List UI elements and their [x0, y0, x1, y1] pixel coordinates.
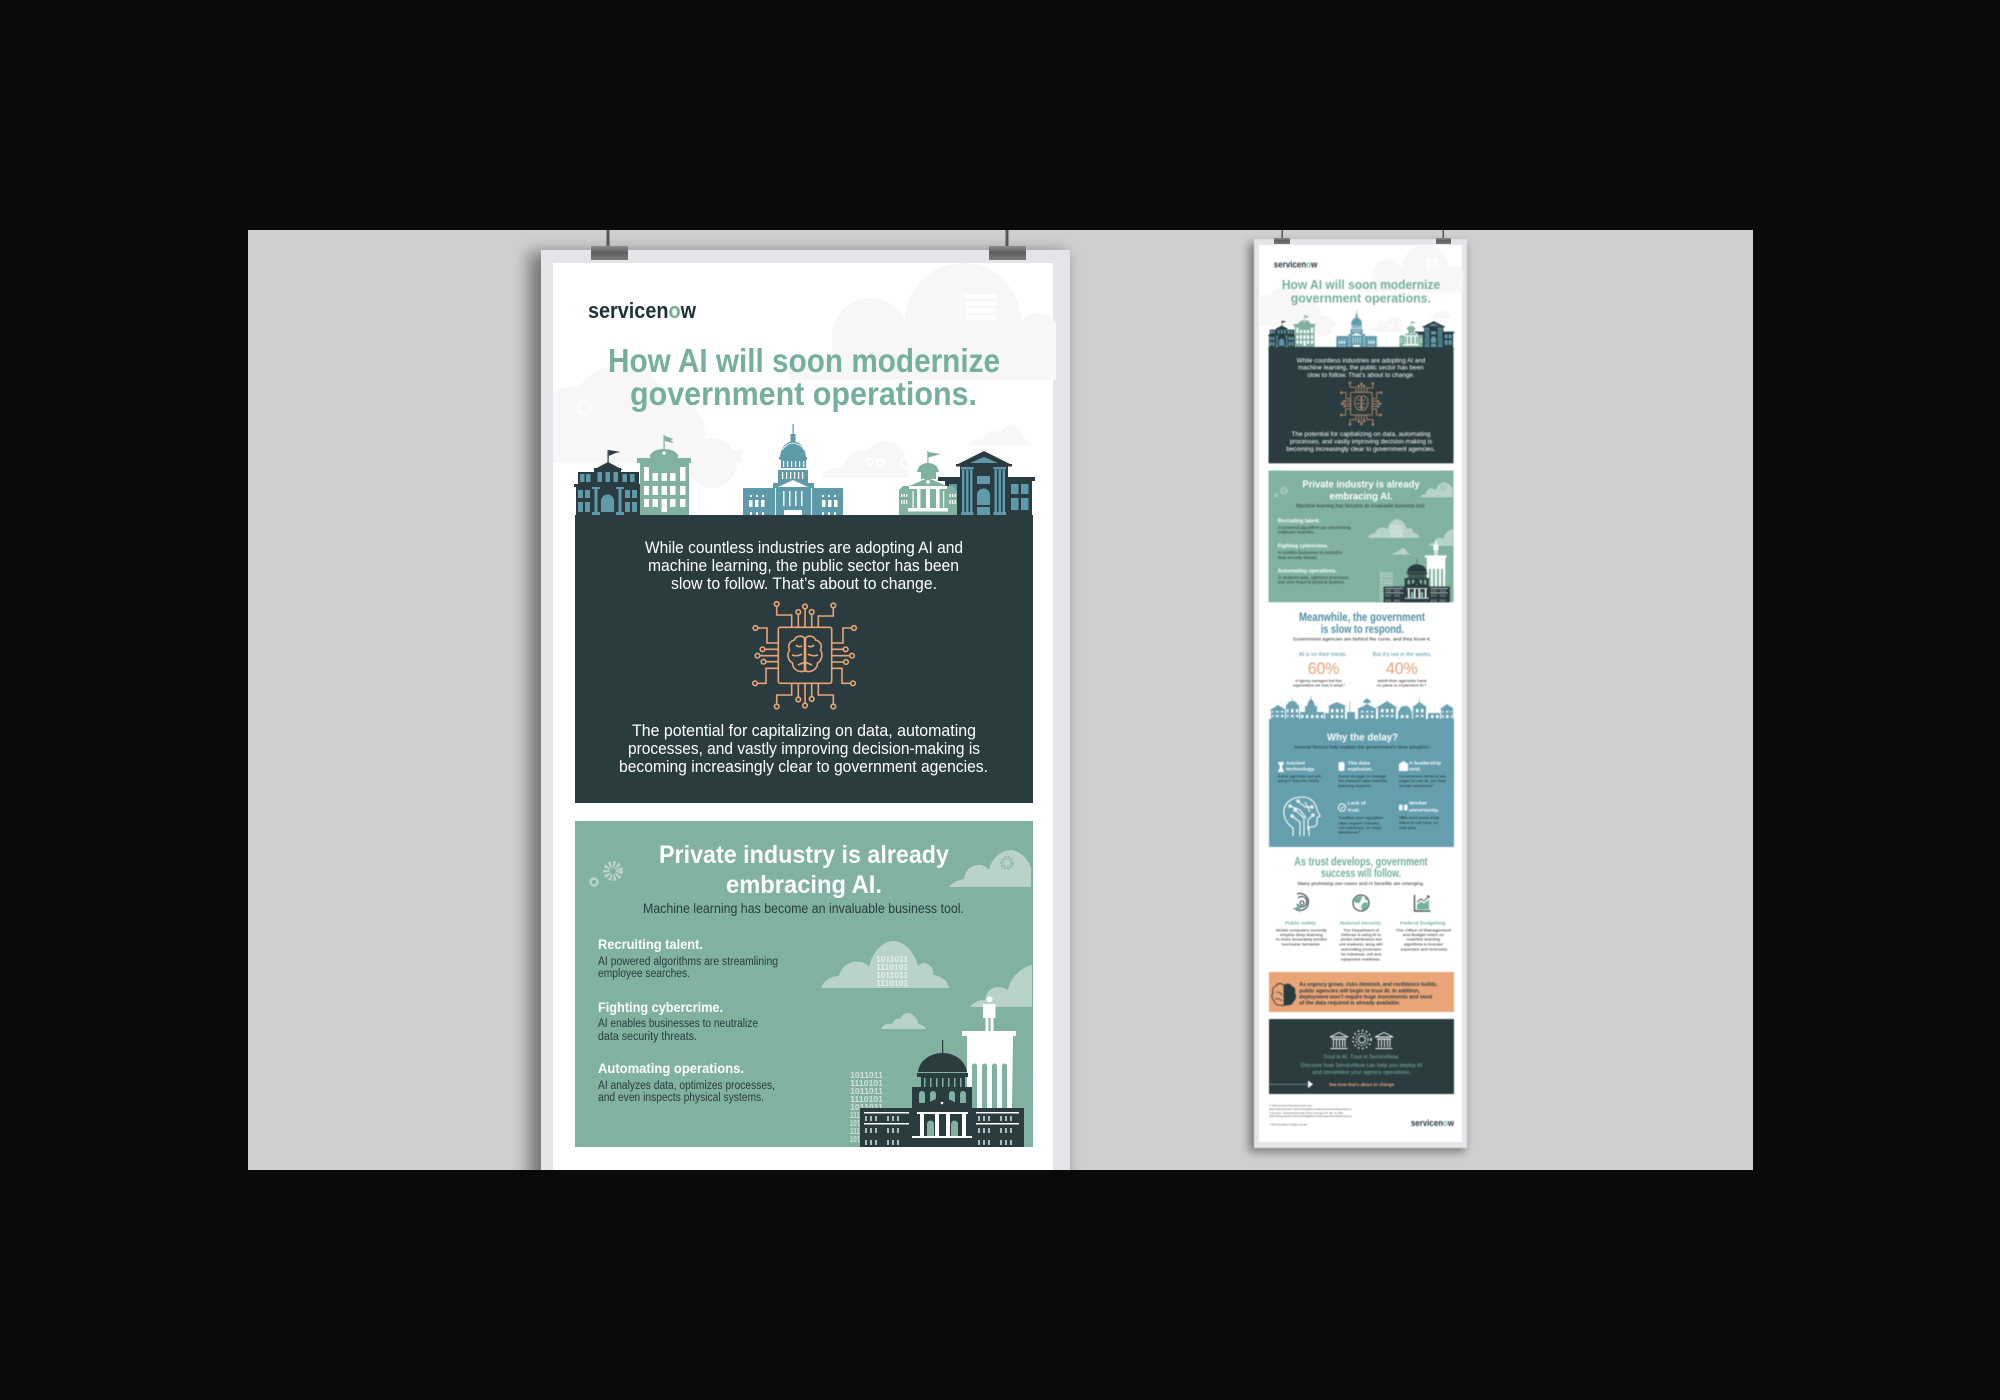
call to action text — [1301, 1055, 1422, 1076]
column: national security: equipment readiness. — [1341, 957, 1381, 962]
stat: 60 percent: AI is on their minds. — [1299, 652, 1347, 658]
panel: private industry: 111 — [850, 1126, 860, 1136]
panel: private industry: 1011011 — [850, 1070, 883, 1080]
icon: rising chart — [1414, 895, 1430, 911]
column: federal budgeting: Federal budgeting. — [1400, 920, 1447, 926]
scaled top of poster: embracing AI. — [1330, 492, 1393, 503]
item: lack of trust: Tradition and regulation — [1338, 815, 1383, 820]
scaled top of poster: slow to follow. That’s about to change. — [1307, 372, 1415, 379]
skyline strip: blue buildings — [1270, 696, 1454, 719]
column: public safety — [1276, 920, 1328, 946]
item: worker uncertainty: 78% don’t know what — [1399, 815, 1440, 820]
scaled top of poster: Fighting cybercrime. — [1278, 544, 1329, 550]
item: data explosion: the massive data machine — [1338, 778, 1387, 783]
item: lack of trust: decisions.³ — [1338, 830, 1361, 835]
callout text: of the data required is already available. — [1299, 1001, 1401, 1007]
column: national security: predict maintenance and — [1341, 937, 1382, 942]
column: public safety: hurricane behavior. — [1282, 941, 1321, 946]
item: worker uncertainty: their jobs. — [1399, 825, 1417, 830]
column: national security: National security. — [1340, 920, 1382, 926]
section: trust develops — [1276, 856, 1452, 962]
item: lack of trust: trust. — [1348, 807, 1360, 813]
stat: 40 percent: admit their agencies have — [1377, 678, 1427, 683]
stat: 40 percent: 40% — [1386, 660, 1418, 678]
item: cybercrime: Fighting cybercrime. — [598, 999, 723, 1015]
item: ancient technology — [1278, 761, 1321, 783]
logo: servicenow — [588, 298, 697, 323]
footnotes: https://www.accenture.com/us-en/insights/us-federal-government/study-future-ai — [1269, 1115, 1352, 1118]
intro text continued: becoming increasingly clear to government agencies. — [619, 758, 988, 776]
building: dark hall — [574, 450, 642, 515]
column: national security — [1339, 920, 1383, 962]
poster: full infographic — [1252, 239, 1467, 1148]
column: national security: The Department of — [1343, 927, 1380, 932]
scaled top of poster: AI enables businesses to neutralize — [1278, 550, 1343, 555]
item: lack of trust: not machines, to make — [1338, 825, 1381, 830]
column: national security: Defense is using AI to — [1341, 932, 1381, 937]
scaled top of poster: servicenow — [1274, 259, 1317, 269]
icon: circuit head — [1284, 797, 1320, 836]
footnotes: 1. 2018 Government Business Council survey. — [1269, 1104, 1313, 1108]
item: cybercrime: data security threats. — [598, 1031, 697, 1043]
item: data explosion: Some struggle to manage — [1338, 773, 1386, 778]
intro text continued — [619, 722, 988, 776]
item: ancient technology: Ancient — [1286, 761, 1305, 767]
item: automating — [598, 1060, 775, 1104]
intro text: slow to follow. That’s about to change. — [671, 575, 937, 593]
column: national security: automating processes — [1341, 947, 1381, 952]
icon: brain chip — [753, 602, 856, 709]
panel: private industry: 1011011 — [850, 1102, 883, 1112]
private industry text — [598, 841, 964, 1104]
panel: private industry — [575, 821, 1033, 1147]
scaled top of poster: data security threats. — [1278, 555, 1318, 560]
footnotes: https://www.accenture.com/us-en/insights/us-federal-government/study-future-ai — [1269, 1108, 1352, 1111]
scaled top of poster: AI powered algorithms are streamlining — [1278, 525, 1351, 530]
call to action text: Discover how ServiceNow can help you deploy AI — [1301, 1063, 1422, 1069]
intro text: machine learning, the public sector has been — [648, 557, 959, 575]
item: recruiting: Recruiting talent. — [598, 936, 703, 952]
item: data explosion: The data — [1348, 761, 1370, 767]
scaled top of poster: Private industry is already — [1302, 480, 1420, 491]
stat: 60 percent: organizations are slow to adopt.¹ — [1293, 683, 1346, 688]
item: cybercrime — [598, 999, 758, 1043]
column: federal budgeting: The Office of Management — [1396, 927, 1452, 932]
call to action text: Trust in AI. Trust in ServiceNow. — [1323, 1055, 1399, 1061]
binary digits: 1011011 — [876, 955, 909, 964]
scaled top of poster: Machine learning has become an invaluable business tool. — [1296, 504, 1426, 510]
poster: large close-up — [534, 250, 1070, 1180]
item: worker uncertainty — [1399, 801, 1440, 830]
column: national security: for individual, unit and — [1341, 952, 1381, 957]
item: leadership void: remain untrained.³ — [1399, 783, 1435, 788]
item: worker uncertainty: effect AI will have on — [1399, 820, 1438, 825]
panel: private industry: 111 — [850, 1110, 860, 1120]
background clouds — [534, 263, 1060, 488]
binary digits — [876, 955, 909, 988]
binary digits: 1110101 — [876, 963, 909, 972]
footnotes: © 2019 ServiceNow. All rights reserved. — [1269, 1124, 1308, 1126]
clouds — [821, 850, 1032, 1029]
item: lack of trust: Lack of — [1348, 801, 1366, 807]
item: data explosion: explosion. — [1348, 767, 1373, 773]
item: data explosion: learning requires. — [1338, 783, 1371, 788]
item: lack of trust: often require humans, — [1338, 820, 1380, 825]
scaled top of poster: and even inspects physical systems. — [1278, 580, 1345, 585]
stat: 60 percent: of agency managers feel that — [1295, 678, 1343, 683]
item: recruiting: employee searches. — [598, 968, 690, 980]
link: See how that’s about to change — [1329, 1082, 1394, 1088]
binder clips on large poster — [591, 230, 1026, 260]
skyline of government buildings — [574, 424, 1035, 515]
stat: 40 percent: But it’s not in the works. — [1373, 652, 1432, 658]
item: leadership void: A leadership — [1409, 761, 1441, 767]
intro text — [645, 539, 963, 593]
scaled top of poster: While countless industries are adopting AI and — [1297, 357, 1426, 364]
building: blue capitol — [743, 424, 843, 515]
scaled top of poster — [1252, 245, 1464, 602]
panel: private industry: 1011011 — [850, 1086, 883, 1096]
item: leadership void: eager to use AI, yet they — [1399, 778, 1446, 783]
heading — [659, 841, 949, 899]
column: federal budgeting: algorithms to forecast — [1404, 942, 1444, 947]
item: automating: AI analyzes data, optimizes processes, — [598, 1080, 775, 1092]
heading: is slow to respond. — [1321, 624, 1404, 636]
item: recruiting — [598, 936, 778, 980]
callout text — [1299, 982, 1438, 1007]
subheading: Machine learning has become an invaluable business tool. — [643, 901, 964, 916]
item: cybercrime: AI enables businesses to neutralize — [598, 1018, 758, 1030]
heading: As trust develops, government — [1294, 856, 1428, 868]
heading — [1294, 856, 1428, 880]
item: recruiting: AI powered algorithms are streamlining — [598, 956, 778, 968]
panel: intro — [575, 515, 1033, 803]
item: leadership void: Government workers are — [1399, 773, 1446, 778]
column: public safety: to more accurately predict — [1276, 937, 1328, 942]
panel: call to action — [1269, 1019, 1454, 1094]
stat: 40 percent: no plans to implement AI.² — [1377, 683, 1427, 688]
scaled top of poster: Recruiting talent. — [1278, 518, 1321, 524]
icon: gears — [590, 864, 620, 886]
heading: Private industry is already — [659, 841, 949, 869]
panel: why the delay — [1269, 719, 1454, 847]
column: federal budgeting: expenses and revenues. — [1401, 947, 1448, 952]
column: national security: unit readiness, along with — [1339, 942, 1383, 947]
title: government operations. — [630, 375, 977, 412]
heading: success will follow. — [1321, 868, 1401, 880]
item: worker uncertainty: uncertainty. — [1409, 807, 1439, 813]
scaled top of poster: The potential for capitalizing on data, automating — [1292, 431, 1431, 438]
scaled top of poster: Automating operations. — [1278, 568, 1337, 574]
stat: 40 percent — [1373, 652, 1432, 688]
panel: private industry: 101 — [850, 1134, 860, 1144]
binder clips on full poster — [1274, 230, 1451, 244]
display wall backdrop — [248, 230, 1753, 1192]
scaled top of poster: How AI will soon modernize — [1282, 277, 1440, 292]
callout text: deployment won’t require huge investments and most — [1299, 994, 1432, 1000]
item: ancient technology: Some agencies are still — [1278, 773, 1321, 778]
heading: Meanwhile, the government — [1299, 612, 1425, 624]
icon: institutions and gear — [1330, 1030, 1393, 1048]
item: data explosion — [1338, 761, 1387, 788]
item: lack of trust — [1338, 801, 1383, 835]
icon: radar — [1293, 893, 1308, 913]
item: worker uncertainty: Worker — [1409, 801, 1427, 807]
scaled top of poster: government operations. — [1291, 291, 1431, 306]
item: automating: and even inspects physical systems. — [598, 1092, 764, 1104]
heading — [1299, 612, 1425, 636]
binary digits: 1110101 — [876, 979, 909, 988]
stat: 60 percent — [1293, 652, 1347, 688]
building: green offices — [637, 435, 691, 515]
title: How AI will soon modernize — [608, 342, 1000, 379]
item: ancient technology: using IT from the 1990s. — [1278, 778, 1320, 783]
heading: embracing AI. — [726, 871, 882, 899]
panel: private industry: 1110101 — [850, 1078, 883, 1088]
heading: Why the delay? — [1327, 732, 1398, 744]
logo small: servicenow — [1411, 1118, 1455, 1128]
building: dark courthouse — [938, 451, 1035, 515]
column: public safety: employ deep learning — [1280, 932, 1323, 937]
scaled top of poster: becoming increasingly clear to government agencies. — [1286, 446, 1435, 453]
call to action text: and streamline your agency operations. — [1312, 1070, 1411, 1076]
panel: private industry: 101 — [850, 1118, 860, 1128]
item: leadership void — [1399, 761, 1446, 788]
intro text continued: The potential for capitalizing on data, automating — [632, 722, 976, 740]
column: federal budgeting — [1396, 920, 1452, 952]
scaled top of poster: processes, and vastly improving decision-making is — [1290, 439, 1433, 446]
subheading: Government agencies are behind the curve, and they know it. — [1293, 636, 1431, 642]
section: government slow to respond — [1293, 612, 1432, 688]
subheading: Many promising use-cases and AI benefits are emerging. — [1298, 881, 1424, 886]
intro text continued: processes, and vastly improving decision-making is — [628, 740, 980, 758]
icon: half circuit brain — [1272, 984, 1296, 1006]
panel: urgency callout — [1269, 972, 1454, 1012]
icon: globe — [1353, 895, 1369, 911]
stat: 60 percent: 60% — [1308, 660, 1340, 678]
item: leadership void: void. — [1409, 767, 1421, 773]
column: public safety: NOAA computers currently — [1276, 927, 1327, 932]
scaled top of poster: employee searches. — [1278, 530, 1315, 535]
item: ancient technology: technology. — [1286, 767, 1315, 773]
illustration: column and figure — [962, 996, 1016, 1108]
panel: private industry: 1110101 — [850, 1094, 883, 1104]
footnotes: 2. Accenture, “Federal workers ready to thrive in the age of AI,” Dec. 10, 2018. — [1269, 1112, 1344, 1115]
title — [608, 342, 1000, 412]
scaled top of poster: machine learning, the public sector has been — [1298, 365, 1424, 372]
arrow — [1270, 1080, 1313, 1088]
scaled top of poster: AI analyzes data, optimizes processes, — [1278, 575, 1349, 580]
footnotes — [1269, 1104, 1352, 1126]
item: automating: Automating operations. — [598, 1060, 744, 1076]
intro text: While countless industries are adopting AI and — [645, 539, 963, 557]
column: federal budgeting: and Budget relies on — [1403, 932, 1444, 937]
illustration: dark capitol — [860, 1040, 1024, 1147]
callout text: public agencies will begin to trust AI. In addition, — [1299, 988, 1420, 994]
callout text: As urgency grows, risks diminish, and confidence builds, — [1299, 982, 1438, 988]
building: green rotunda — [899, 451, 957, 515]
subheading: Several factors help explain the government’s slow adoption. — [1294, 745, 1430, 750]
column: federal budgeting: machine learning — [1407, 937, 1440, 942]
binary digits: 1011011 — [876, 971, 909, 980]
column: public safety: Public safety. — [1285, 920, 1317, 926]
